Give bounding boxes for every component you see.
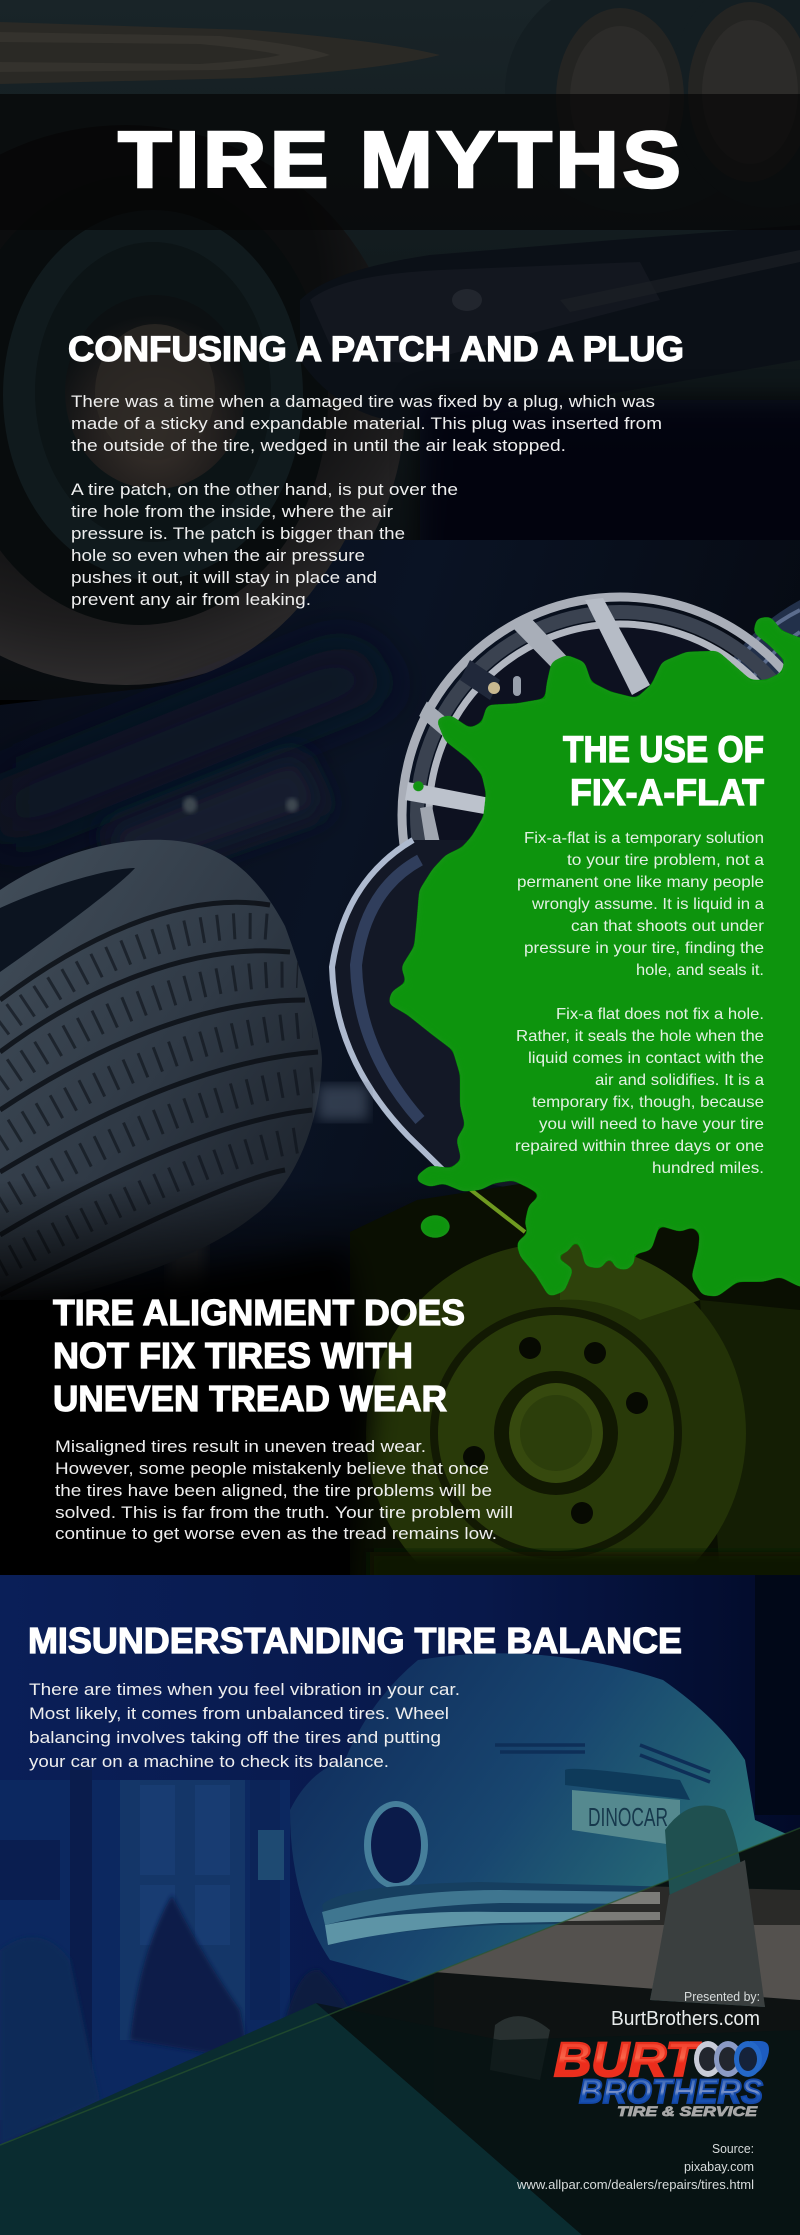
louvres [495, 1745, 710, 1782]
body text: pressure is. The patch is bigger than the [71, 524, 405, 543]
body text: There are times when you feel vibration in your car. [29, 1680, 460, 1699]
body text: prevent any air from leaking. [71, 590, 311, 609]
section 3 background: green brake disc [0, 1184, 800, 1575]
body text [71, 392, 662, 609]
black left fade [172, 1257, 384, 1572]
source [516, 2141, 754, 2192]
body text: A tire patch, on the other hand, is put over the [71, 480, 458, 499]
heading: UNEVEN TREAD WEAR [53, 1378, 447, 1419]
body text: can that shoots out under [571, 918, 765, 935]
presented by [611, 1989, 760, 2030]
body text: wrongly assume. It is liquid in a [531, 896, 764, 913]
icon: wheels [694, 2041, 769, 2077]
body text: you will need to have your tire [539, 1116, 764, 1133]
heading [53, 1292, 465, 1419]
source: pixabay.com [684, 2159, 754, 2174]
brake disc [366, 1244, 746, 1556]
fade into section [0, 1180, 800, 1320]
body text: tire hole from the inside, where the air [71, 502, 393, 521]
logo: Burt Brothers [554, 2034, 769, 2119]
body text: your car on a machine to check its balance. [29, 1752, 389, 1771]
body text: made of a sticky and expandable material. This plug was inserted from [71, 414, 662, 433]
body text: However, some people mistakenly believe that once [55, 1459, 489, 1478]
stacked tire [0, 840, 322, 1315]
body text: the outside of the tire, wedged in until the air leak stopped. [71, 436, 566, 455]
tire hole [0, 868, 135, 972]
presented by: Presented by: [684, 1989, 760, 2004]
body text: There was a time when a damaged tire was fixed by a plug, which was [71, 392, 655, 411]
body text: hole so even when the air pressure [71, 546, 365, 565]
hooded figure [650, 1806, 765, 2007]
bumper [322, 1882, 800, 1945]
background: classic car photo [0, 0, 800, 700]
house wall and door [0, 1770, 290, 2120]
body text: repaired within three days or one [515, 1138, 764, 1155]
body text: Fix-a-flat is a temporary solution [524, 830, 764, 847]
green splat [390, 618, 800, 1295]
logo: Burt Brothers: BROTHERS [579, 2073, 763, 2111]
wheel with whitewall [0, 230, 404, 685]
license plate: DINOCAR [588, 1802, 668, 1832]
body text: temporary fix, though, because [532, 1094, 764, 1111]
source: Source: [712, 2141, 754, 2156]
body text [29, 1680, 460, 1771]
body text: liquid comes in contact with the [528, 1050, 764, 1067]
body text: solved. This is far from the truth. Your tire problem will [55, 1503, 513, 1522]
far right tire [720, 600, 800, 700]
body text: Most likely, it comes from unbalanced tires. Wheel [29, 1704, 449, 1723]
title: TIRE MYTHS [118, 115, 681, 204]
heading: THE USE OF [563, 729, 764, 770]
headline band [0, 94, 800, 230]
body text: pushes it out, it will stay in place and [71, 568, 377, 587]
body text: continue to get worse even as the tread remains low. [55, 1524, 497, 1543]
body text: hundred miles. [652, 1160, 764, 1177]
panel: the use of fix-a-flat [515, 729, 765, 1177]
side mirror and shrubs [0, 1830, 375, 2145]
body text [515, 830, 765, 1177]
alloy rim [398, 592, 784, 845]
tail light [364, 1801, 428, 1889]
logo: Burt Brothers: BURT [554, 2034, 701, 2087]
lower grey part of photo under diagonal [330, 1828, 800, 2235]
body text: the tires have been aligned, the tire problems will be [55, 1481, 492, 1500]
panel: tire alignment [53, 1292, 513, 1543]
heading: MISUNDERSTANDING TIRE BALANCE [28, 1620, 682, 1661]
chrome fin [0, 22, 440, 84]
license plate [572, 1790, 680, 1846]
disc bolt holes [463, 1337, 648, 1524]
logo: Burt Brothers: TIRE & SERVICE [617, 2103, 758, 2119]
dark teal triangle [0, 2003, 582, 2235]
body text: pressure in your tire, finding the [524, 940, 764, 957]
heading: NOT FIX TIRES WITH [53, 1335, 413, 1376]
body text: Rather, it seals the hole when the [516, 1028, 764, 1045]
panel: confusing a patch and a plug [68, 330, 684, 609]
twin headlights [556, 2, 800, 94]
body text: Fix-a flat does not fix a hole. [556, 1006, 764, 1023]
VW beetle body [290, 1653, 800, 2000]
bumper [300, 225, 800, 425]
body text: air and solidifies. It is a [595, 1072, 764, 1089]
body text: balancing involves taking off the tires and putting [29, 1728, 441, 1747]
body text: Misaligned tires result in uneven tread wear. [55, 1437, 426, 1456]
steel wheel [318, 840, 520, 1190]
source: www.allpar.com/dealers/repairs/tires.html [516, 2177, 754, 2192]
right dark [416, 396, 800, 540]
body text: to your tire problem, not a [567, 852, 764, 869]
body text: permanent one like many people [517, 874, 764, 891]
heading: TIRE ALIGNMENT DOES [53, 1292, 465, 1333]
panel: misunderstanding tire balance [28, 1620, 682, 1771]
body text: hole, and seals it. [636, 962, 764, 979]
heading: CONFUSING A PATCH AND A PLUG [68, 330, 684, 369]
body text [55, 1437, 513, 1543]
section 4 background: blue beetle photo [0, 1575, 800, 2235]
heading: FIX-A-FLAT [570, 772, 764, 813]
presented by: BurtBrothers.com [611, 2008, 760, 2030]
heading [563, 729, 764, 813]
rear caliper [700, 1300, 800, 1575]
background: tires photo [0, 540, 800, 1320]
